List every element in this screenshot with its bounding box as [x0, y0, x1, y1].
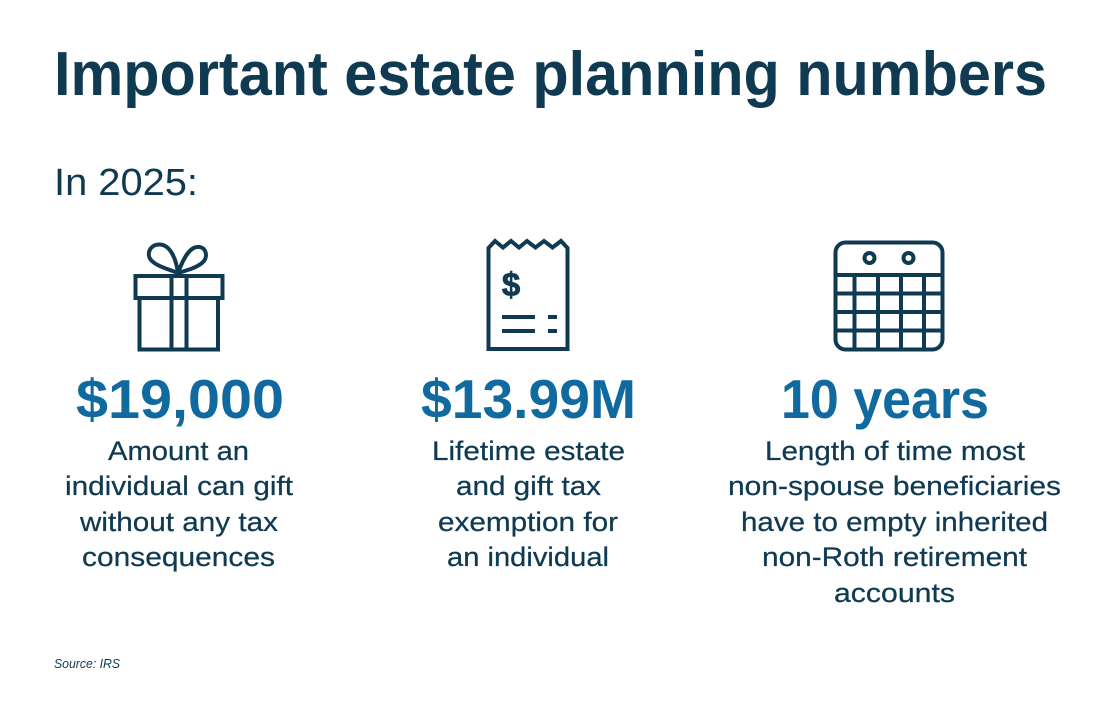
description: lifetime exemption: exemption for [438, 507, 618, 537]
icon: receipt [488, 241, 568, 349]
description: inherited account timeline: non-Roth retirement [762, 542, 1028, 572]
description: lifetime exemption: and gift tax [456, 471, 602, 501]
description: inherited account timeline: non-spouse beneficiaries [728, 471, 1061, 501]
column: lifetime exemption [421, 241, 636, 572]
description: lifetime exemption: Lifetime estate [432, 436, 625, 466]
description: gift amount: individual can gift [65, 471, 294, 501]
statistic: 10 years: 10 years [781, 368, 989, 430]
description: inherited account timeline: Length of time most [765, 436, 1026, 466]
description: inherited account timeline [728, 436, 1061, 608]
icon: receipt: $ [502, 266, 520, 303]
description: gift amount: Amount an [108, 436, 249, 466]
icon: gift box [136, 244, 222, 350]
column: inherited account timeline [728, 242, 1061, 608]
description: lifetime exemption [432, 436, 625, 572]
description: gift amount [65, 436, 294, 572]
description: inherited account timeline: accounts [834, 578, 955, 608]
column: gift amount [65, 244, 294, 572]
icon: calendar [836, 242, 942, 350]
description: lifetime exemption: an individual [447, 542, 609, 572]
title: Important estate planning numbers [54, 40, 1047, 109]
description: inherited account timeline: have to empty inherited [741, 507, 1048, 537]
statistic: $13.99M: $13.99M [421, 368, 636, 430]
description: gift amount: consequences [82, 542, 275, 572]
subheading: year: In 2025: [54, 162, 198, 204]
source note: Source: IRS [54, 657, 121, 671]
description: gift amount: without any tax [79, 507, 279, 537]
statistic: $19,000: $19,000 [76, 368, 284, 430]
